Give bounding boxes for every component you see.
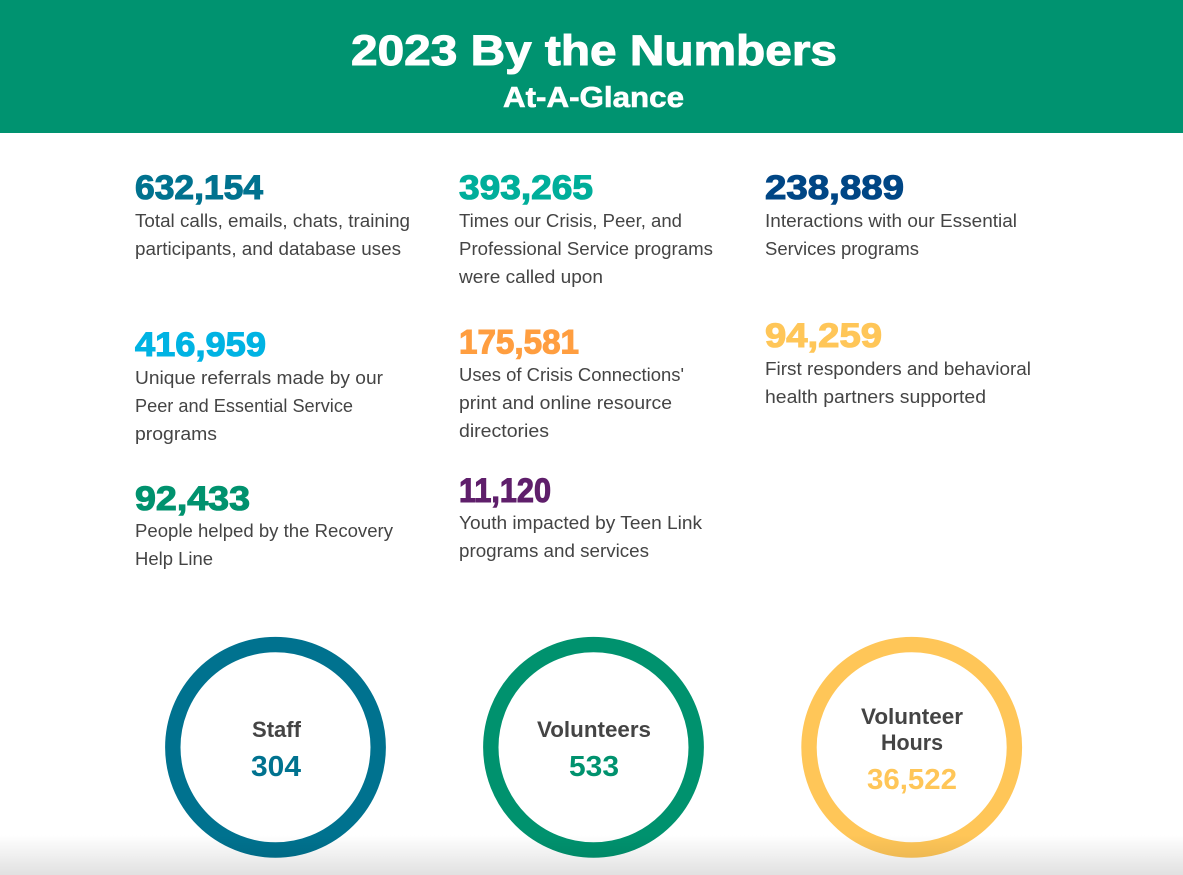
stat: essential services: 238,889: [765, 169, 904, 207]
circle: staff: Staff: [252, 717, 302, 742]
circle: volunteers: Volunteers: [537, 717, 651, 742]
circle: staff: 304: [251, 751, 301, 783]
stat: unique referrals: 416,959: [135, 326, 266, 364]
stat: first responders: health partners supported: [765, 387, 986, 407]
stat: teen link: programs and services: [459, 541, 649, 561]
stat: essential services: Services programs: [765, 239, 919, 259]
title: 2023 By the Numbers: [351, 27, 837, 75]
stat: teen link: [459, 472, 703, 561]
bottom shadow fade: [0, 835, 1183, 875]
stat: unique referrals: programs: [135, 424, 217, 444]
stat: essential services: Interactions with our Essential: [765, 211, 1017, 231]
stat: crisis, peer and professional services: Times our Crisis, Peer, and: [459, 211, 682, 231]
stat: resource directories: print and online resource: [459, 393, 672, 413]
stat: unique referrals: Peer and Essential Service: [135, 396, 353, 416]
stat: crisis, peer and professional services: Professional Service programs: [459, 239, 713, 259]
stat: first responders: 94,259: [765, 317, 882, 355]
stat: total contacts: 632,154: [135, 169, 263, 207]
stat: unique referrals: [135, 326, 383, 444]
circle: volunteer hours: Hours: [881, 730, 943, 755]
stat: unique referrals: Unique referrals made by our: [135, 368, 383, 388]
stat: teen link: 11,120: [459, 472, 551, 510]
stat: crisis, peer and professional services: [458, 169, 713, 287]
stat: recovery help line: Help Line: [135, 549, 213, 569]
stat: recovery help line: 92,433: [135, 480, 250, 518]
circle: volunteers: [491, 645, 696, 850]
stat: first responders: First responders and behavioral: [765, 359, 1031, 379]
stat: crisis, peer and professional services: 393,265: [459, 169, 593, 207]
stat: first responders: [765, 317, 1031, 407]
stat: recovery help line: People helped by the Recovery: [135, 521, 393, 541]
circle: staff: [173, 645, 378, 850]
circle: volunteer hours: 36,522: [867, 764, 957, 796]
stat: total contacts: Total calls, emails, chats, training: [135, 211, 410, 231]
circle: volunteer hours: Volunteer: [861, 704, 963, 729]
stat: resource directories: directories: [459, 421, 549, 441]
stat: crisis, peer and professional services: were called upon: [458, 267, 603, 287]
circle: volunteer hours: [809, 645, 1014, 850]
subtitle: At-A-Glance: [503, 82, 684, 114]
stat: resource directories: [459, 324, 684, 441]
stat: teen link: Youth impacted by Teen Link: [459, 513, 703, 533]
stat: resource directories: Uses of Crisis Connections': [459, 365, 684, 385]
stat: recovery help line: [135, 480, 393, 569]
stat: total contacts: participants, and database uses: [135, 239, 401, 259]
circle: volunteers: 533: [569, 751, 619, 783]
stat: resource directories: 175,581: [459, 324, 579, 362]
stat: total contacts: [135, 169, 410, 259]
header banner: [0, 0, 1183, 133]
stat: essential services: [765, 169, 1017, 259]
